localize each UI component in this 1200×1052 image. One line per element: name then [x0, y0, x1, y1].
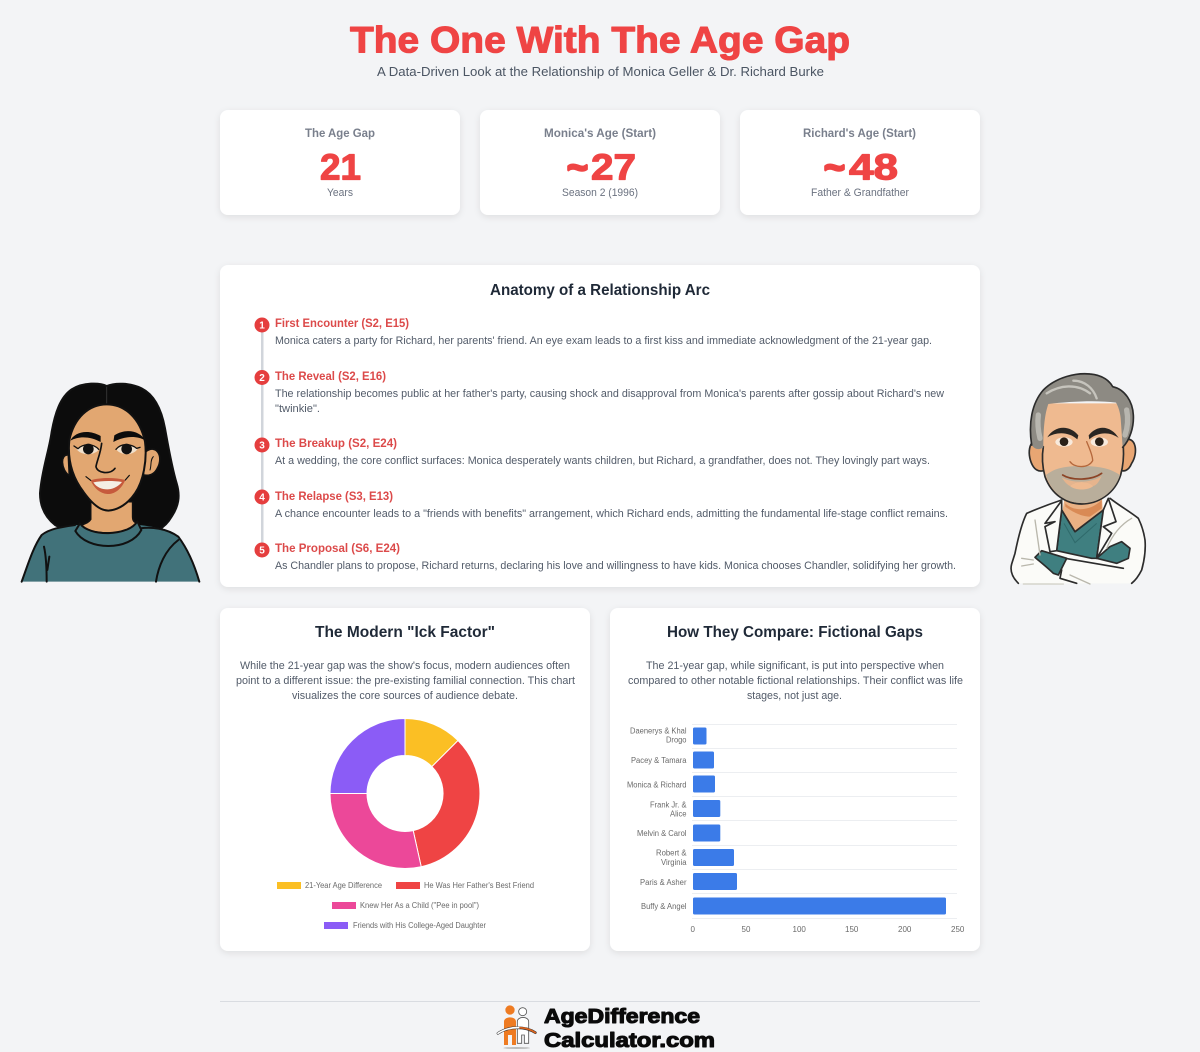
- subtitle: A Data-Driven Look at the Relationship of Monica Geller & Dr. Richard Burke: [377, 65, 824, 79]
- beard: [1046, 466, 1120, 503]
- eyes: [1055, 437, 1073, 447]
- lapels: [1045, 498, 1116, 558]
- bar chart: 0: [690, 925, 696, 934]
- panel: monica's age stat: ~: [567, 146, 588, 188]
- step 5: As Chandler plans to propose, Richard returns, declaring his love and willingness to have kids. Monica chooses Chandler, solidifying her growth.: [275, 560, 956, 572]
- ears: [1029, 439, 1135, 471]
- illustration: richard: [1011, 374, 1145, 584]
- text: ick factor description: While the 21-year gap was the show's focus, modern audiences often: [240, 660, 570, 672]
- bar chart: Drogo: [666, 736, 687, 744]
- face: [69, 404, 146, 511]
- panel: monica's age stat: 27: [591, 146, 636, 188]
- panel: richard's age stat: ~: [824, 146, 845, 188]
- donut legend: [277, 881, 534, 930]
- eyebrows: [70, 431, 145, 442]
- panel: modern ick factor: [220, 608, 590, 951]
- step 5: [254, 542, 956, 572]
- step 2: The relationship becomes public at her father's party, causing shock and disapproval from Monica's parents after gossip about Richard's new: [275, 388, 944, 400]
- panel: the age gap stat: 21: [320, 146, 361, 188]
- step 3: 3: [259, 441, 265, 452]
- panel: the age gap stat: Years: [327, 187, 354, 199]
- bar chart: Frank Jr. &: [650, 800, 687, 810]
- bar chart: [627, 724, 965, 934]
- panel: richard's age stat: Richard's Age (Start): [803, 126, 916, 140]
- step 3: The Breakup (S2, E24): [275, 438, 397, 450]
- donut chart: [330, 718, 480, 868]
- nose and smile: [1070, 442, 1093, 467]
- heading: anatomy of a relationship arc: Anatomy of a Relationship Arc: [490, 282, 710, 299]
- illustration: monica: [22, 384, 199, 582]
- bar chart: Alice: [670, 810, 687, 818]
- heading: fictional gaps: How They Compare: Fictional Gaps: [667, 624, 923, 641]
- neck: [80, 502, 137, 533]
- panel: relationship arc timeline: [220, 265, 980, 587]
- panel: monica's age stat: Season 2 (1996): [562, 187, 638, 199]
- sweater: [22, 525, 199, 582]
- text: ick factor description: point to a different issue: the pre-existing familial connection. This chart: [236, 675, 575, 687]
- step 3: [254, 438, 930, 467]
- panel: fictional gaps comparison: [610, 608, 980, 951]
- crossed arms: [1023, 557, 1123, 583]
- title: The One With The Age Gap: [350, 18, 850, 60]
- donut legend: He Was Her Father's Best Friend: [424, 881, 534, 890]
- hair: [1030, 374, 1133, 449]
- panel: the age gap stat: [220, 110, 460, 215]
- panel: richard's age stat: [740, 110, 980, 215]
- step 1: Monica caters a party for Richard, her parents' friend. An eye exam leads to a first kiss and immediate acknowledgment of the 21-year gap.: [275, 335, 932, 347]
- step 2: [254, 370, 944, 415]
- panel: richard's age stat: Father & Grandfather: [811, 187, 909, 199]
- panel: richard's age stat: 48: [849, 146, 898, 188]
- bar chart: 50: [742, 925, 751, 934]
- bar chart: 200: [898, 925, 912, 934]
- bar chart: Melvin & Carol: [637, 829, 687, 838]
- bar chart: 250: [951, 925, 965, 934]
- step 5: The Proposal (S6, E24): [275, 543, 400, 555]
- panel: the age gap stat: The Age Gap: [305, 126, 375, 140]
- step 2: The Reveal (S2, E16): [275, 371, 386, 383]
- step 1: First Encounter (S2, E15): [275, 318, 409, 330]
- text: ick factor description: visualizes the core sources of audience debate.: [292, 690, 518, 702]
- bar chart: Robert &: [656, 848, 687, 858]
- bar chart: Monica & Richard: [627, 780, 686, 790]
- step 4: A chance encounter leads to a "friends with benefits" arrangement, which Richard ends, admitting the fundamental life-stage conflict remains.: [275, 508, 948, 520]
- logo text: Calculator.com: [544, 1029, 715, 1052]
- scrubs: [1057, 510, 1103, 558]
- donut legend: 21-Year Age Difference: [305, 881, 383, 890]
- step 3: At a wedding, the core conflict surfaces: Monica desperately wants children, but Richard, a grandfather, does not. They lovingly part ways.: [275, 455, 930, 467]
- donut legend: Knew Her As a Child ("Pee in pool"): [360, 901, 479, 910]
- text: fictional gaps description: [628, 660, 963, 702]
- text: fictional gaps description: The 21-year gap, while significant, is put into perspective when: [646, 660, 944, 672]
- face: [1042, 403, 1124, 504]
- panel: monica's age stat: Monica's Age (Start): [544, 126, 656, 140]
- step 4: 4: [259, 493, 265, 504]
- bar chart: Buffy & Angel: [641, 902, 687, 911]
- text: ick factor description: [236, 660, 575, 702]
- panel: monica's age stat: [480, 110, 720, 215]
- text: fictional gaps description: stages, not just age.: [747, 690, 842, 702]
- donut legend: Friends with His College-Aged Daughter: [353, 921, 486, 930]
- logo icon: [498, 1005, 535, 1049]
- neck: [1063, 492, 1103, 532]
- bar chart: Pacey & Tamara: [631, 756, 687, 765]
- step 5: 5: [259, 546, 265, 557]
- logo text: AgeDifference: [544, 1005, 700, 1028]
- logo text: [544, 1005, 715, 1052]
- bar chart: Daenerys & Khal: [630, 726, 687, 736]
- footer divider: [220, 1001, 980, 1002]
- step 2: "twinkie".: [275, 403, 320, 415]
- bar chart: Paris & Asher: [640, 878, 687, 887]
- bar chart: Virginia: [661, 858, 687, 867]
- step 2: 2: [259, 373, 265, 384]
- nose: [96, 443, 115, 473]
- mouth: [91, 478, 125, 494]
- step 1: [254, 318, 932, 347]
- step 4: [254, 490, 948, 520]
- step 4: The Relapse (S3, E13): [275, 491, 393, 503]
- brows: [1047, 428, 1119, 439]
- ears: [62, 449, 160, 476]
- eyes: [77, 445, 137, 454]
- heading: ick factor: The Modern "Ick Factor": [315, 624, 495, 641]
- coat: [1011, 498, 1145, 583]
- step 1: 1: [259, 321, 265, 332]
- bar chart: 100: [792, 925, 806, 934]
- text: fictional gaps description: compared to other notable fictional relationships. Their conflict was life: [628, 675, 963, 687]
- bar chart: 150: [845, 925, 859, 934]
